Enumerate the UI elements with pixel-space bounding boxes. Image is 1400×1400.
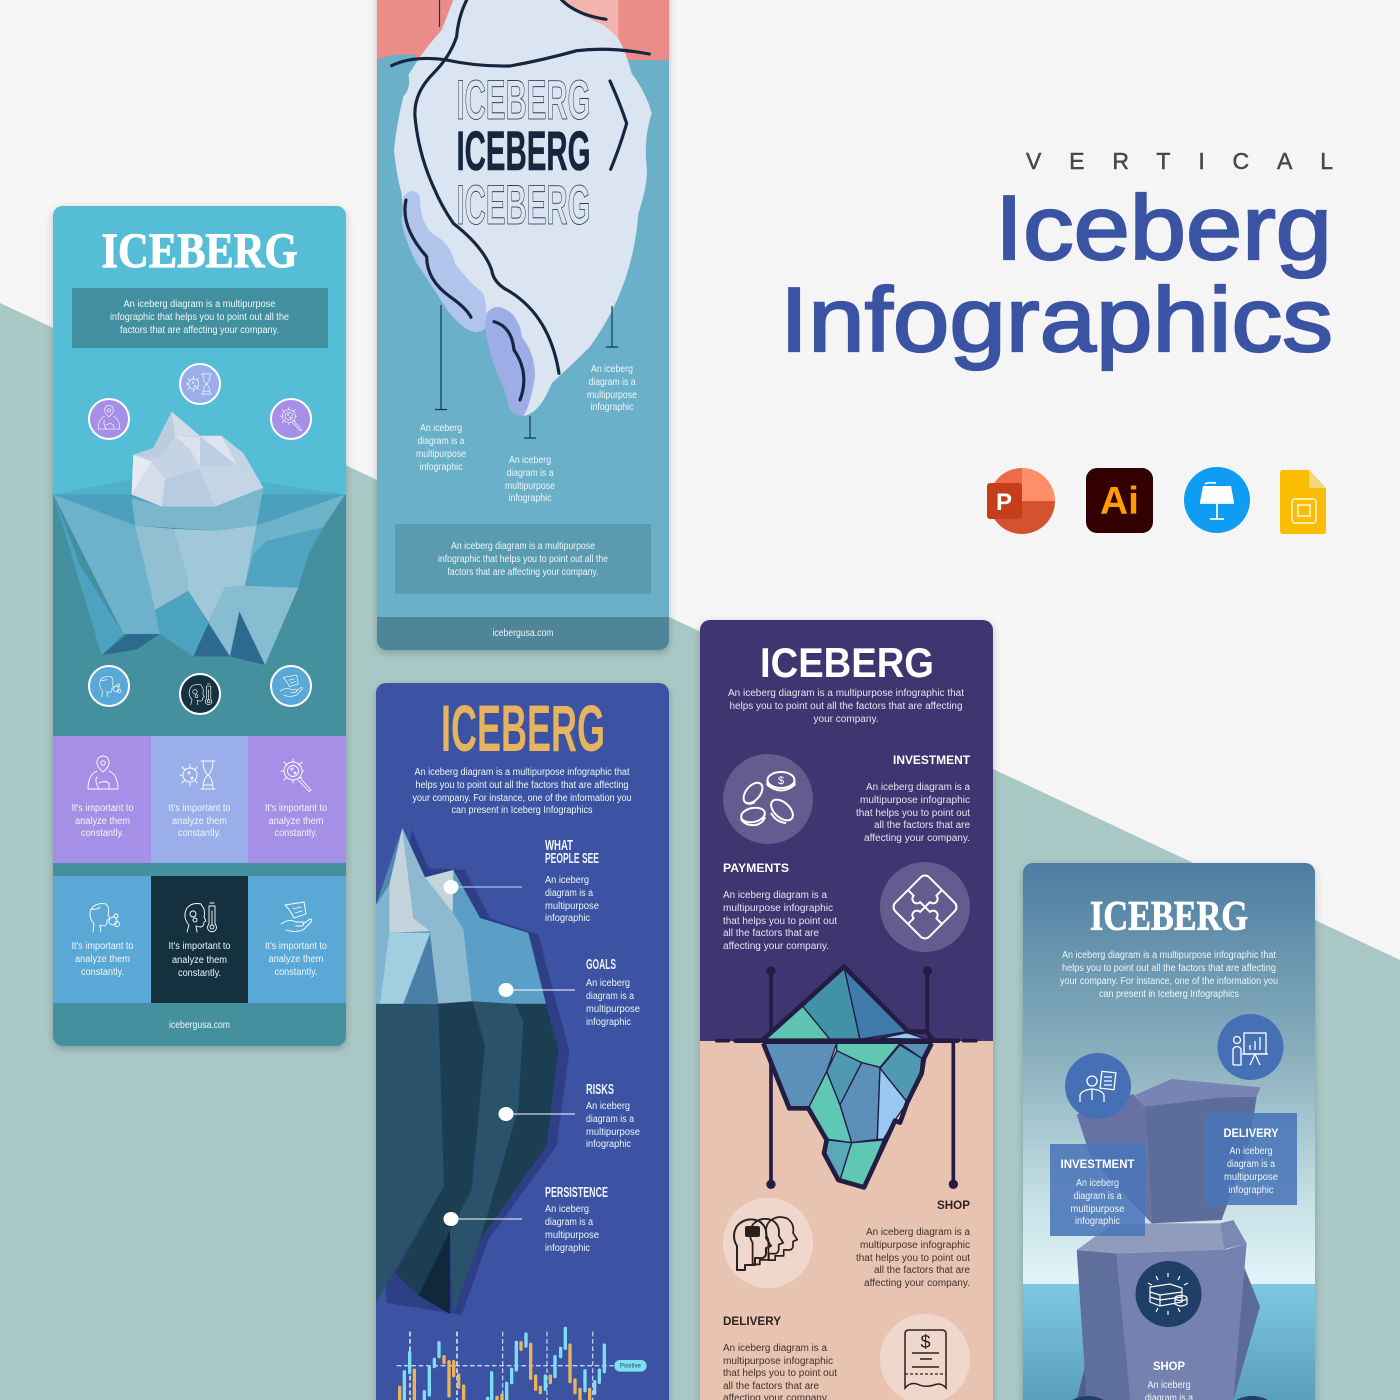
label: delivery: multipurpose infographic <box>723 1356 833 1367</box>
panel title: ICEBERG <box>441 691 605 765</box>
panel title: ICEBERG <box>1090 894 1248 940</box>
label: risks: RISKS <box>586 1081 614 1098</box>
heading block <box>780 148 1333 371</box>
label: persistence: diagram is a <box>545 1217 593 1228</box>
label: persistence: PERSISTENCE <box>545 1184 608 1201</box>
label: what people see: An iceberg <box>545 875 589 886</box>
card: person: It's important to <box>72 803 134 814</box>
icon: puzzle <box>880 862 970 952</box>
label: delivery: all the factors that are <box>723 1381 819 1392</box>
label: delivery: An iceberg diagram is a <box>723 1343 827 1354</box>
label: persistence: multipurpose <box>545 1230 599 1241</box>
label: right: diagram is a <box>588 377 636 388</box>
card: virus: constantly. <box>274 828 318 839</box>
label: payments: multipurpose infographic <box>723 903 833 914</box>
label box: delivery: An iceberg <box>1230 1146 1272 1157</box>
label: investment: that helps you to point out <box>856 808 970 819</box>
intro text: helps you to point out all the factors that are affecting <box>1062 963 1276 974</box>
label: payments: all the factors that are <box>723 928 819 939</box>
label: goals <box>586 956 640 1028</box>
icon badge: presenter <box>1218 1014 1284 1080</box>
panel: coral and blue iceberg infographic <box>377 0 669 650</box>
label: what people see: multipurpose <box>545 901 599 912</box>
footer url: icebergusa.com <box>492 628 554 639</box>
legend pill: positive: Positive <box>620 1364 641 1370</box>
label: delivery: that helps you to point out <box>723 1368 837 1379</box>
label: middle <box>505 455 555 504</box>
label box: delivery: DELIVERY <box>1224 1126 1278 1140</box>
card: virus: analyze them <box>268 816 324 827</box>
label: shop: that helps you to point out <box>856 1253 970 1264</box>
label: shop: SHOP <box>1153 1359 1185 1373</box>
label: what people see: WHAT <box>545 837 573 854</box>
label: persistence: infographic <box>545 1243 590 1254</box>
label: investment: affecting your company. <box>864 833 970 844</box>
stacked title: ICEBERG <box>456 173 590 236</box>
label: what people see <box>545 837 599 924</box>
title: iceberg infographics: Infographics <box>780 270 1333 371</box>
card: hourglass: analyze them <box>172 816 227 827</box>
icon: illustrator <box>1086 468 1153 533</box>
candlestick chart <box>397 1328 647 1400</box>
label: risks <box>586 1081 640 1150</box>
card: person <box>53 736 151 863</box>
stacked title: ICEBERG <box>456 119 590 182</box>
icon badge: hourglass <box>180 364 220 404</box>
label box: investment: diagram is a <box>1074 1191 1122 1202</box>
card: cough <box>53 876 151 1003</box>
label: investment: all the factors that are <box>874 820 970 831</box>
label: payments: that helps you to point out <box>723 916 837 927</box>
panel: teal iceberg infographic <box>53 206 346 1046</box>
label: what people see: diagram is a <box>545 888 593 899</box>
intro text box: factors that are affecting your company. <box>120 325 279 336</box>
icon badge: investor <box>1065 1053 1131 1119</box>
stacked title: ICEBERG <box>456 68 590 131</box>
card: hand: It's important to <box>265 941 327 952</box>
card: hourglass: It's important to <box>168 803 231 814</box>
intro text box: An iceberg diagram is a multipurpose <box>451 541 595 552</box>
low poly iceberg <box>53 412 345 665</box>
icon: receipt: $ <box>920 1332 931 1352</box>
card: virus: It's important to <box>265 803 327 814</box>
intro text box: An iceberg diagram is a multipurpose <box>124 299 276 310</box>
card: person: analyze them <box>75 816 130 827</box>
label: what people see: PEOPLE SEE <box>545 850 599 867</box>
icon: powerpoint: P <box>996 489 1012 516</box>
icon: keynote <box>1184 467 1250 533</box>
card: hand: constantly. <box>274 967 318 978</box>
label box: investment: INVESTMENT <box>1060 1157 1135 1171</box>
intro text: An iceberg diagram is a multipurpose infographic that <box>1062 950 1276 961</box>
intro text: your company. For instance, one of the information you <box>1060 976 1278 987</box>
card: virus <box>248 736 346 863</box>
label: investment: INVESTMENT <box>893 753 971 767</box>
label: middle: An iceberg <box>509 455 551 466</box>
label: payments: An iceberg diagram is a <box>723 890 827 901</box>
card: thermometer <box>151 876 248 1003</box>
label: investment: multipurpose infographic <box>860 795 970 806</box>
label box: delivery <box>1205 1113 1297 1205</box>
intro text: helps you to point out all the factors that are affecting <box>730 701 962 712</box>
label: payments <box>723 861 837 952</box>
icon: illustrator: Ai <box>1100 480 1139 523</box>
label: left: An iceberg <box>420 423 462 434</box>
label: payments: PAYMENTS <box>723 861 789 875</box>
label box: investment: An iceberg <box>1076 1178 1119 1189</box>
icon badge: virus <box>271 399 311 439</box>
label: goals: GOALS <box>586 956 616 973</box>
stacked title <box>456 68 590 236</box>
card: hourglass: constantly. <box>178 828 221 839</box>
rock iceberg <box>1077 1079 1261 1400</box>
intro text: can present in Iceberg Infographics <box>452 805 592 816</box>
label: risks: An iceberg <box>586 1101 630 1112</box>
label: investment <box>856 753 971 844</box>
label: goals: infographic <box>586 1017 631 1028</box>
card: hourglass <box>151 736 248 863</box>
intro text box: infographic that helps you to point out all the <box>438 554 608 565</box>
icon badge: hand <box>271 666 311 706</box>
card: hand: analyze them <box>268 954 324 965</box>
label: shop: An iceberg diagram is a <box>866 1227 970 1238</box>
icon badge: money stacks <box>1136 1261 1202 1327</box>
label: delivery: DELIVERY <box>723 1314 781 1328</box>
intro text: An iceberg diagram is a multipurpose infographic that <box>728 688 964 699</box>
label: middle: diagram is a <box>506 468 554 479</box>
intro text: helps you to point out all the factors that are affecting <box>416 780 628 791</box>
intro text: your company. <box>814 714 878 725</box>
card: cough: constantly. <box>81 967 124 978</box>
panel title: ICEBERG <box>760 639 934 686</box>
label: left: infographic <box>420 462 462 473</box>
label: shop: affecting your company. <box>864 1278 970 1289</box>
intro text box: factors that are affecting your company. <box>448 567 598 578</box>
label: right: An iceberg <box>591 364 633 375</box>
label: shop: An iceberg <box>1148 1380 1190 1391</box>
software icons <box>987 467 1326 534</box>
label: what people see: infographic <box>545 913 590 924</box>
label: goals: multipurpose <box>586 1004 640 1015</box>
label: left <box>416 423 466 473</box>
icon badge: cough <box>89 666 129 706</box>
label: shop: all the factors that are <box>874 1265 970 1276</box>
label box: delivery: multipurpose <box>1224 1172 1278 1183</box>
label: middle: infographic <box>508 493 552 504</box>
faceted iceberg <box>376 828 569 1315</box>
intro text <box>728 688 964 725</box>
card: thermometer: constantly. <box>178 968 221 979</box>
icon: heads with puzzle <box>723 1198 813 1288</box>
label: persistence <box>545 1184 608 1254</box>
label: shop <box>1145 1359 1193 1400</box>
legend pill: positive <box>614 1360 647 1372</box>
label: left: multipurpose <box>416 449 466 460</box>
panel: purple and peach iceberg infographic <box>700 620 993 1400</box>
label: risks: diagram is a <box>586 1114 634 1125</box>
label: left: diagram is a <box>418 436 465 447</box>
card: person: constantly. <box>81 828 124 839</box>
card: hand <box>248 876 346 1003</box>
label: right: infographic <box>590 402 634 413</box>
label box: investment <box>1050 1144 1145 1236</box>
panel: blue iceberg infographic <box>376 683 669 1400</box>
card: cough: analyze them <box>75 954 130 965</box>
card: thermometer: It's important to <box>168 941 231 952</box>
label: delivery <box>723 1314 837 1400</box>
icon: receipt <box>880 1314 970 1400</box>
intro text: your company. For instance, one of the information you <box>412 793 632 804</box>
intro text box <box>395 524 651 594</box>
label: risks: infographic <box>586 1139 631 1150</box>
intro text box <box>72 288 328 348</box>
label box: investment: infographic <box>1075 1216 1120 1227</box>
icon: coins <box>723 754 813 844</box>
title: iceberg infographics <box>780 178 1333 371</box>
title: iceberg infographics: Iceberg <box>995 178 1332 279</box>
icon: coins: $ <box>778 775 784 787</box>
panel title: ICEBERG <box>102 222 298 278</box>
panel: gradient sky iceberg infographic <box>1023 863 1315 1400</box>
callout markers <box>444 880 575 1226</box>
intro text <box>412 767 632 816</box>
label: shop: multipurpose infographic <box>860 1240 970 1251</box>
label box: delivery: infographic <box>1228 1185 1274 1196</box>
intro text <box>1060 950 1278 1000</box>
label box: delivery: diagram is a <box>1227 1159 1275 1170</box>
label: payments: affecting your company. <box>723 941 829 952</box>
overline: vertical: VERTICAL <box>1026 148 1333 174</box>
intro text: An iceberg diagram is a multipurpose infographic that <box>414 767 630 778</box>
icon: powerpoint <box>987 468 1055 534</box>
card: cough: It's important to <box>72 941 134 952</box>
card: thermometer: analyze them <box>172 955 227 966</box>
organic iceberg <box>392 0 652 416</box>
icon: google slides <box>1280 470 1326 534</box>
label: right: multipurpose <box>587 390 637 401</box>
label: goals: An iceberg <box>586 978 630 989</box>
label: middle: multipurpose <box>505 481 555 492</box>
label: investment: An iceberg diagram is a <box>866 782 970 793</box>
label: shop: SHOP <box>937 1198 970 1212</box>
leader lines <box>435 0 618 438</box>
label: persistence: An iceberg <box>545 1204 589 1215</box>
icon badge: person <box>89 399 129 439</box>
label box: investment: multipurpose <box>1070 1204 1125 1215</box>
polygon iceberg <box>717 966 976 1189</box>
icon badge: thermometer <box>180 674 220 714</box>
intro text box: infographic that helps you to point out all the <box>110 312 289 323</box>
lower badges cropped by page edge <box>1055 1396 1285 1400</box>
label: right <box>587 364 637 413</box>
label: goals: diagram is a <box>586 991 634 1002</box>
label: risks: multipurpose <box>586 1127 640 1138</box>
label: shop <box>856 1198 970 1289</box>
intro text: can present in Iceberg Infographics <box>1099 989 1239 1000</box>
footer url: icebergusa.com <box>169 1020 230 1031</box>
